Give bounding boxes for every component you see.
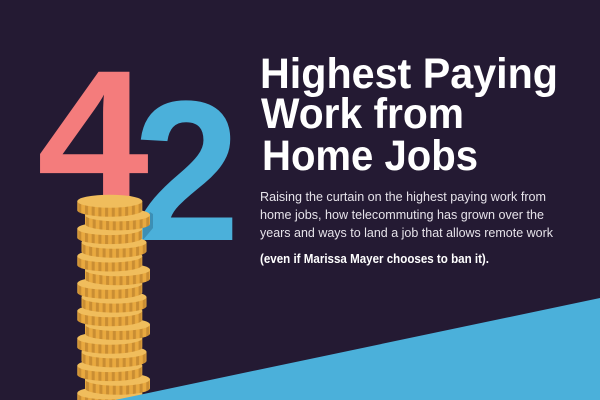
title: Work from (261, 90, 464, 138)
intro paragraph: Raising the curtain on the highest paying work from (260, 189, 546, 204)
intro paragraph: home jobs, how telecommuting has grown over the (260, 207, 544, 222)
bold aside: (even if Marissa Mayer chooses to ban it). (260, 252, 489, 266)
icon: stack of gold coins (77, 195, 153, 400)
big number 2: 2 (133, 60, 240, 283)
intro paragraph: years and ways to land a job that allows remote work (260, 225, 553, 240)
blue diagonal panel (115, 298, 600, 400)
title: Home Jobs (262, 132, 478, 180)
big number 4: 4 (37, 33, 149, 239)
title (260, 50, 558, 180)
title: Highest Paying (260, 50, 558, 98)
intro paragraph (260, 189, 553, 240)
